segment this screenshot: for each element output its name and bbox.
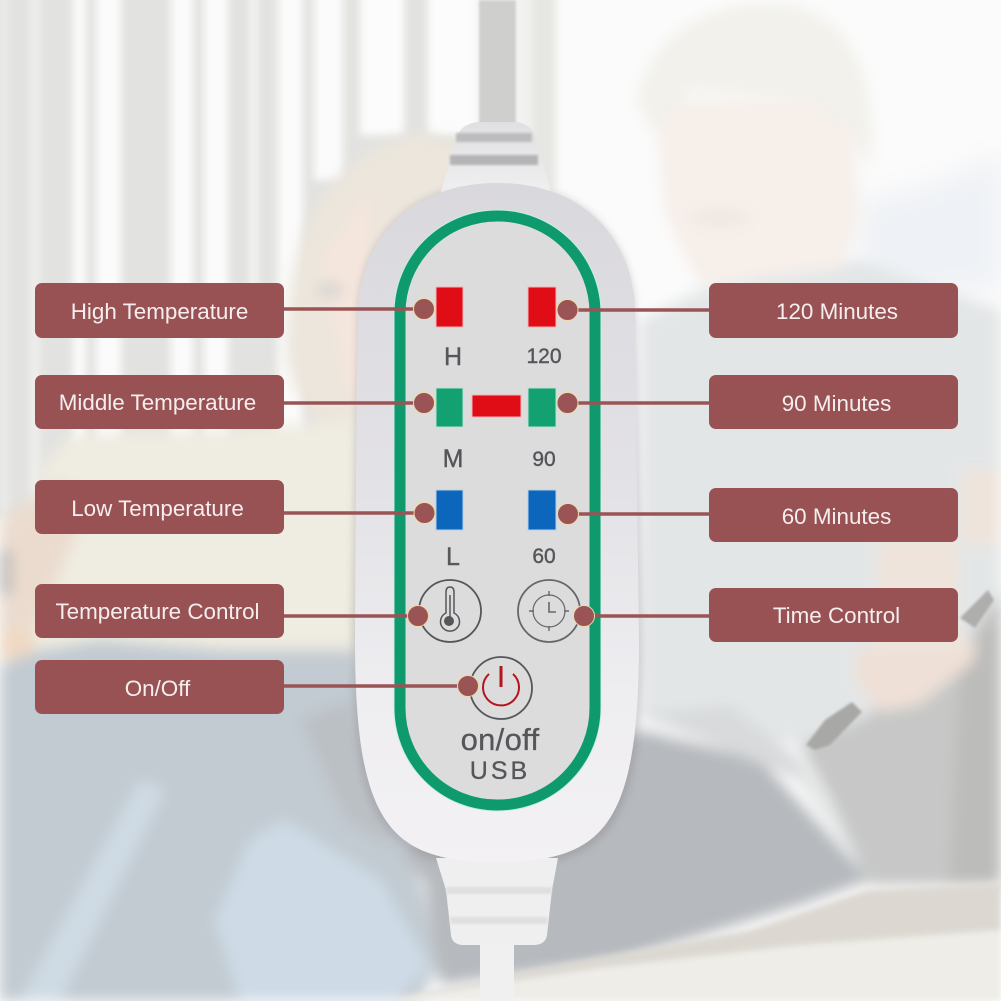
indicator: 90 minutes: [528, 388, 556, 427]
label: Temperature Control: Temperature Control: [55, 599, 260, 624]
icon: power button: [470, 657, 532, 719]
man smile shade: [690, 210, 750, 226]
icon: clock button: [518, 580, 580, 642]
woman eye: [316, 283, 344, 297]
controller shadow: [352, 183, 642, 866]
icon: thermometer button: [419, 580, 481, 642]
label: On/Off: On/Off: [125, 676, 191, 701]
panel with green border: [400, 216, 595, 805]
panel labels: [443, 343, 562, 571]
label: 90 Minutes: [709, 375, 958, 429]
man face: [655, 100, 860, 285]
vertical pole behind controller: [479, 0, 516, 130]
panel labels: 60: [532, 545, 556, 568]
label: 60 Minutes: 60 Minutes: [782, 504, 891, 529]
indicator: 120 minutes: [528, 287, 556, 327]
label: Low Temperature: [35, 480, 284, 534]
jeans light fold left: [20, 780, 165, 1001]
panel labels: L: [446, 543, 460, 571]
man's arm right: [962, 470, 1001, 545]
label: High Temperature: High Temperature: [71, 299, 248, 324]
indicator: 60 minutes: [528, 490, 556, 530]
label: High Temperature: [35, 283, 284, 338]
panel labels: H: [444, 343, 462, 371]
indicator: high temperature: [436, 287, 463, 327]
controller body: [355, 122, 639, 1001]
jeans knee: [215, 820, 430, 1001]
panel labels: 120: [526, 345, 562, 368]
label: Time Control: Time Control: [773, 603, 900, 628]
top strain relief: [441, 122, 551, 192]
label: Temperature Control: [35, 584, 284, 638]
woman hand left: [0, 480, 90, 660]
panel labels: M: [443, 445, 463, 473]
distant sky and hills at right: [860, 150, 1001, 290]
man hand: [855, 640, 975, 712]
label: Low Temperature: Low Temperature: [71, 496, 244, 521]
indicator: middle temperature: [436, 388, 463, 427]
panel labels: 90: [532, 448, 556, 471]
label: 120 Minutes: [709, 283, 958, 338]
on/off USB text: USB: [470, 757, 530, 785]
label: Middle Temperature: Middle Temperature: [59, 390, 256, 415]
woman face: [320, 190, 370, 410]
woman hair: [286, 132, 470, 440]
dark pants: [400, 730, 870, 985]
indicator: low temperature: [436, 490, 463, 530]
bottom strain relief and cord: [436, 858, 558, 1001]
indicator: active bar: [472, 395, 521, 417]
label: 120 Minutes: 120 Minutes: [776, 299, 898, 324]
shell: [355, 183, 639, 862]
woman sweater: [20, 420, 370, 665]
label: On/Off: [35, 660, 284, 714]
label: Time Control: [709, 588, 958, 642]
man shirt: [640, 260, 1001, 745]
label: 90 Minutes: 90 Minutes: [782, 391, 891, 416]
curtains on the left: [0, 0, 556, 520]
shirt hem: [640, 705, 870, 880]
label: Middle Temperature: [35, 375, 284, 429]
jeans dark behind knee: [300, 700, 395, 850]
man hair: [637, 3, 872, 170]
on/off USB text: [461, 722, 539, 785]
jeans: [0, 640, 440, 1001]
connector lines and dots: [284, 298, 709, 696]
grey lap area right: [800, 590, 1001, 885]
remote control: [806, 702, 862, 750]
sofa: [380, 883, 1001, 1001]
on/off USB text: on/off: [461, 722, 539, 757]
label: 60 Minutes: [709, 488, 958, 542]
